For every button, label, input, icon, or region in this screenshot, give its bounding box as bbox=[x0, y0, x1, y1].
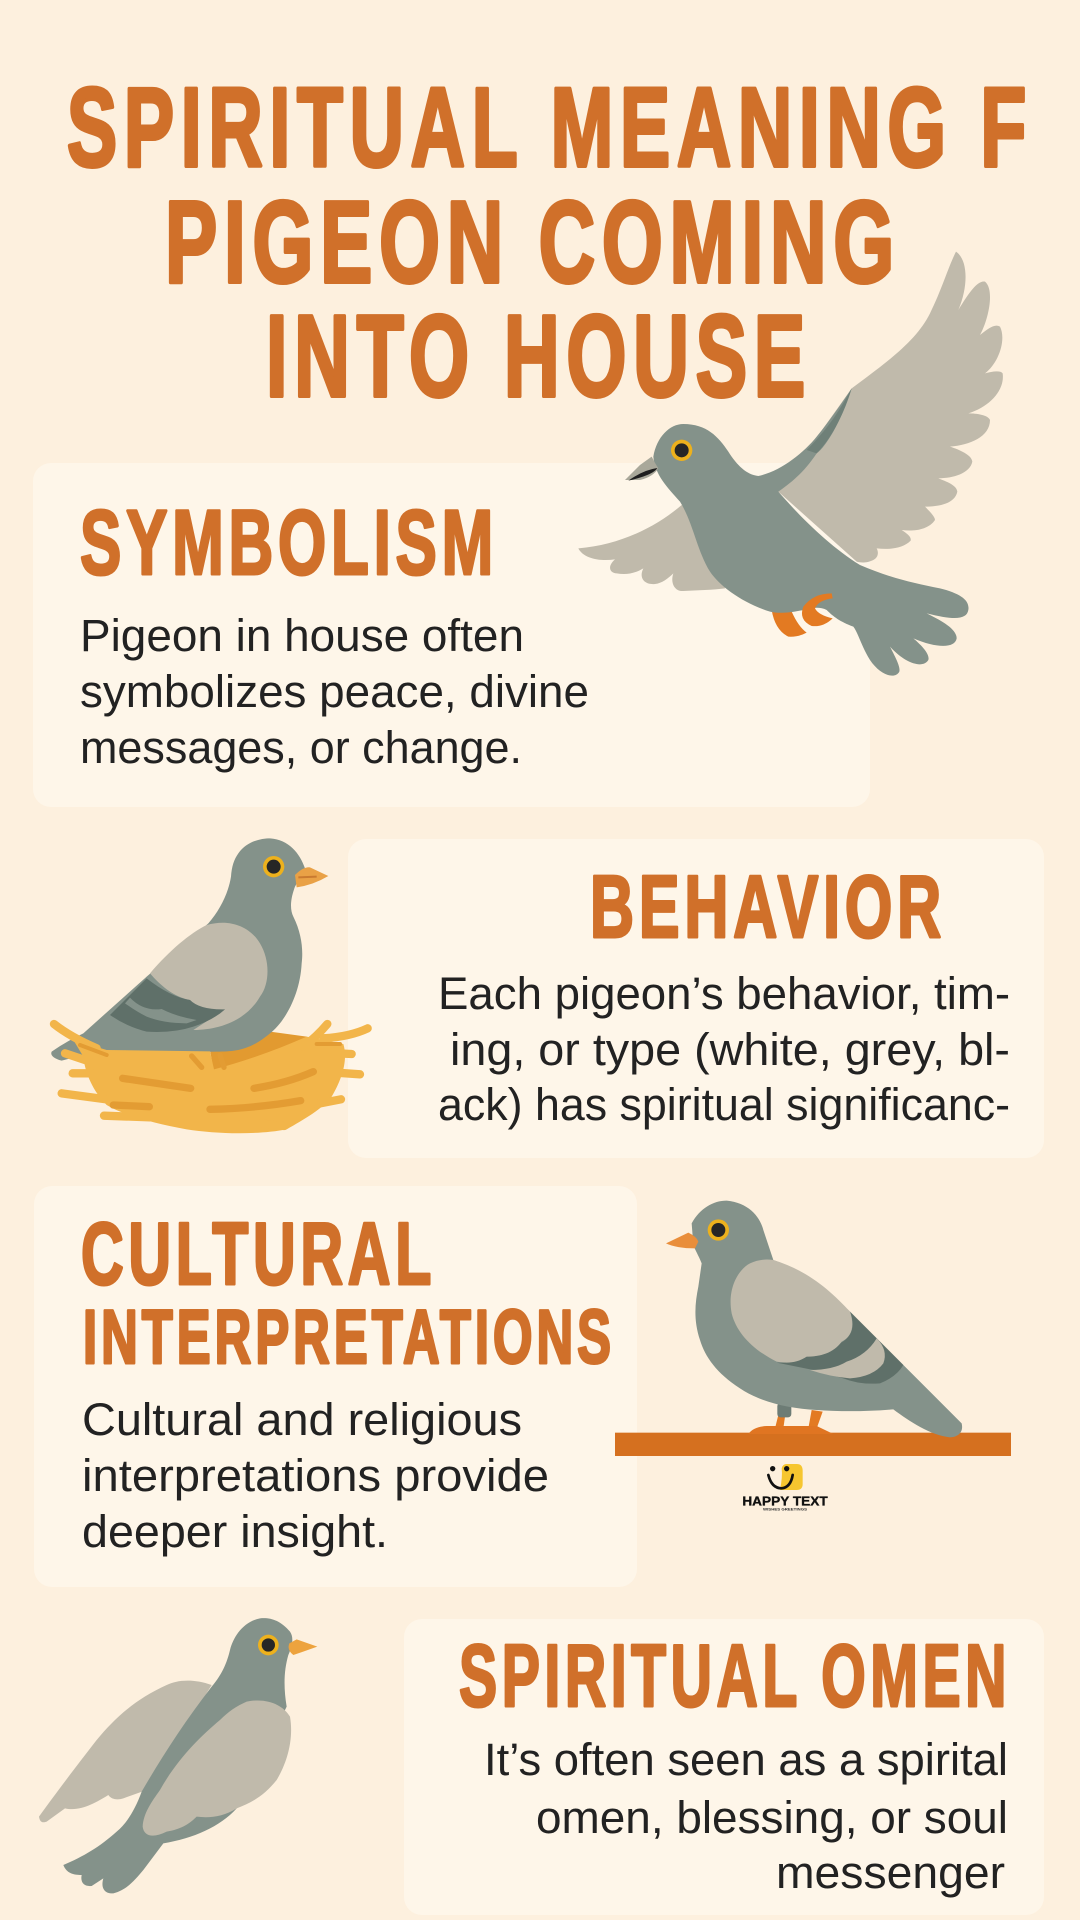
text block: behavior: Each pigeon’s behavior, tim- bbox=[438, 968, 1010, 1019]
logo: happy text: HAPPY TEXT bbox=[742, 1495, 828, 1509]
text block: spiritual omen: It’s often seen as a spirital bbox=[484, 1734, 1008, 1785]
text block: spiritual omen bbox=[484, 1734, 1008, 1898]
text block: behavior bbox=[438, 968, 1010, 1130]
icon: pigeon on nest bbox=[51, 838, 368, 1133]
text block: cultural: Cultural and religious bbox=[82, 1394, 522, 1445]
text block: symbolism: messages, or change. bbox=[80, 722, 522, 773]
icon: pigeon on perch bbox=[615, 1201, 1011, 1456]
text block: cultural bbox=[82, 1394, 549, 1557]
title: INTO HOUSE bbox=[266, 291, 812, 421]
text block: symbolism bbox=[80, 610, 589, 773]
panel: spiritual omen bbox=[404, 1619, 1044, 1915]
text block: symbolism: symbolizes peace, divine bbox=[80, 666, 589, 717]
icon: pigeon with folded wings bbox=[39, 1618, 317, 1893]
logo: happy text: WISHES GREETINGS bbox=[763, 1507, 808, 1511]
panel: cultural interpretations bbox=[34, 1186, 637, 1587]
panel: behavior bbox=[348, 839, 1044, 1158]
text block: behavior: ack) has spiritual significanc- bbox=[438, 1079, 1010, 1130]
heading: interpretations: INTERPRETATIONS bbox=[83, 1295, 615, 1380]
text block: behavior: ing, or type (white, grey, bl- bbox=[450, 1024, 1010, 1075]
logo: happy text bbox=[742, 1464, 828, 1511]
text block: cultural: interpretations provide bbox=[82, 1450, 549, 1501]
panel: symbolism bbox=[33, 463, 870, 807]
title bbox=[67, 65, 1033, 421]
text block: spiritual omen: omen, blessing, or soul bbox=[536, 1792, 1008, 1843]
heading: cultural: CULTURAL bbox=[81, 1204, 436, 1303]
text block: symbolism: Pigeon in house often bbox=[80, 610, 524, 661]
text block: cultural: deeper insight. bbox=[82, 1506, 388, 1557]
icon: flying pigeon bbox=[578, 252, 1003, 676]
heading: symbolism: SYMBOLISM bbox=[80, 492, 498, 594]
text block: spiritual omen: messenger bbox=[776, 1847, 1005, 1898]
